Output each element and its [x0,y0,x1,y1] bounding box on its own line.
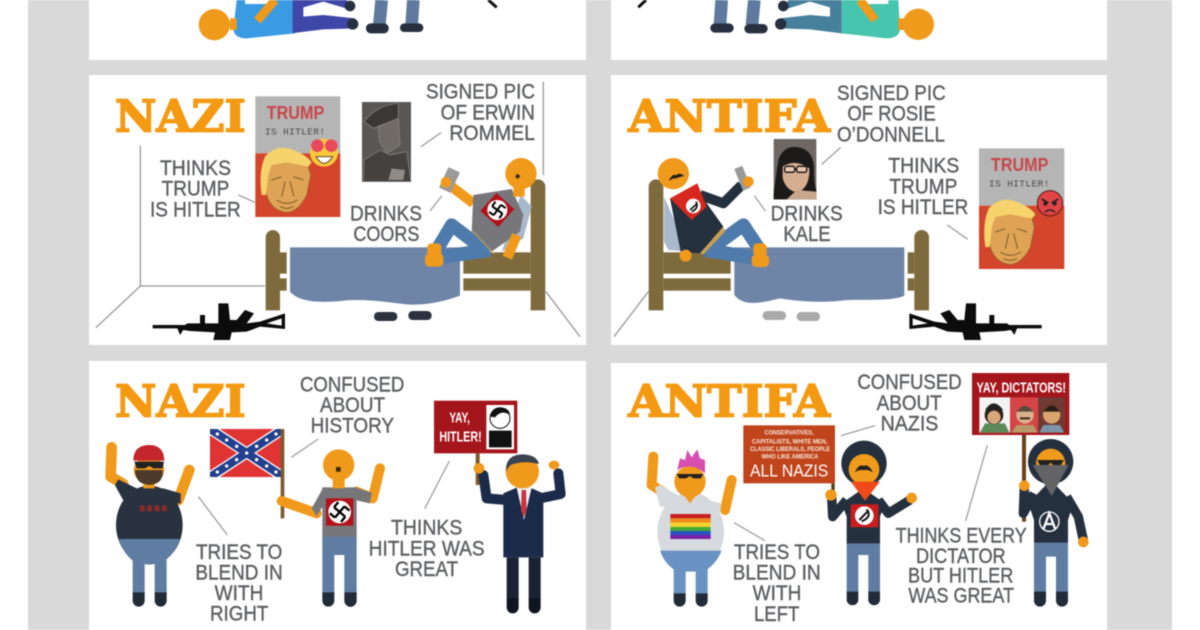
icon: armband emblem [480,193,514,227]
blanket [290,247,460,305]
sign: Yay, Hitler! [434,401,517,485]
rifle on floor [153,303,285,340]
figure: Antifa on bed [658,158,769,267]
figure: Nazi on bed [425,158,537,267]
text: thinks Hitler was great [369,517,485,581]
sign: yay, dictators: YAY, DICTATORS! [977,381,1066,397]
poster: Trump is Hitler with heart-eyes emoji: IS HITLER! [265,126,325,137]
text: drinks kale [771,202,843,246]
icon: bat tip [638,0,646,7]
figure: man in gray armband shirt [282,449,380,607]
text: thinks Trump is Hitler [878,155,968,219]
text: thinks Hitler was great: HITLER WAS [369,537,485,560]
text: thinks Trump is Hitler [150,157,241,221]
text: signed pic: SIGNED PIC [426,80,535,103]
room wall lines [96,82,580,337]
leader line [734,523,765,541]
photo: Rosie O'Donnell portrait [774,139,816,199]
sign: yay, dictators [972,373,1069,522]
leader line [966,445,987,521]
text: drinks kale: DRINKS [771,202,843,225]
leader line [754,196,765,211]
text: tries to blend in with left [733,541,821,626]
leader line [822,147,841,164]
text: drinks Coors: DRINKS [350,203,422,226]
text: signed pic: ROMMEL [449,122,535,145]
panel: top right (cropped) [611,0,1107,60]
leader line [841,426,875,436]
sign: all Nazis: CAPITALISTS, WHITE MEN, [752,438,827,445]
text: tries to blend in with right: TRIES TO [196,541,282,564]
text: thinks Hitler was great: THINKS [391,517,462,540]
text: signed pic: OF ROSIE [847,103,936,126]
icon: hammer and sickle emblem [851,504,878,527]
leader line [430,196,442,211]
rifle on floor [909,303,1042,340]
flag: Confederate battle flag on pole [210,429,284,518]
text: thinks Trump is Hitler: TRUMP [162,178,229,201]
sign: all Nazis: CONSERVATIVES, [764,430,814,437]
text: confused about Nazis: NAZIS [881,413,938,436]
text: thinks Trump is Hitler: IS HITLER [150,198,241,221]
text: thinks Hitler was great: GREAT [395,558,458,581]
sign: all Nazis: ALL NAZIS [750,461,828,481]
figure: person with pride shirt [652,449,732,607]
bed frame [649,179,929,310]
text: thinks Trump is Hitler: THINKS [888,155,959,178]
sign: all Nazis: CLASSIC LIBERALS, PEOPLE [750,446,830,453]
poster: Trump is Hitler with angry emoji: TRUMP [991,154,1048,175]
icon: anarchy symbol [1040,512,1059,531]
icon: armband emblem [326,498,353,526]
text: confused about history [300,374,404,438]
text: thinks Trump is Hitler: THINKS [160,157,231,180]
panel: top left (cropped) [89,0,586,60]
panel: Nazi rally [89,361,586,630]
bed frame [266,179,545,310]
text: tries to blend in with left: TRIES TO [734,541,820,564]
text: tries to blend in with left: BLEND IN [733,561,821,584]
text: confused about history: HISTORY [311,415,394,438]
text: thinks every dictator but Hitler was great: THINKS EVERY [896,525,1027,548]
text: signed pic [837,82,946,147]
leader line [198,497,227,535]
text: thinks every dictator but Hitler was great [896,525,1027,607]
text: tries to blend in with left: LEFT [754,603,799,626]
panel: Antifa bedroom [611,75,1107,345]
sign: Yay, Hitler!: YAY, [449,411,470,427]
text: signed pic [426,80,535,145]
text: thinks Trump is Hitler: IS HITLER [878,196,968,219]
heading: ANTIFA: ANTIFA [627,92,831,143]
text: confused about Nazis: ABOUT [877,392,942,415]
text: signed pic: SIGNED PIC [837,82,946,105]
room wall line [614,292,648,337]
text: tries to blend in with right: BLEND IN [195,561,283,584]
text: confused about Nazis [857,371,962,436]
panel: Antifa rally [611,363,1107,630]
sign: Yay, Hitler!: HITLER! [439,430,482,446]
text: signed pic: OF ERWIN [441,101,535,124]
leader line [421,133,441,147]
poster: Trump is Hitler with angry emoji [979,148,1064,269]
panel: Nazi bedroom [89,75,586,345]
icon: bat tip [488,0,497,7]
text: thinks every dictator but Hitler was great: BUT HITLER [908,565,1013,588]
text: drinks Coors [350,203,422,246]
photo: Erwin Rommel portrait [362,102,411,182]
text: tries to blend in with left: WITH [753,582,801,605]
leader line [291,439,318,457]
figure: heavy man in red cap [111,445,189,607]
text: tries to blend in with right [195,541,283,626]
text: confused about history: CONFUSED [300,374,404,397]
text: tries to blend in with right: RIGHT [210,603,268,626]
blanket [734,247,904,303]
icon: lying figure in blue [199,0,358,40]
sign: all Nazis [743,425,835,517]
text: tries to blend in with right: WITH [215,582,263,605]
slippers under bed [763,311,820,321]
text: thinks Trump is Hitler: TRUMP [889,175,957,198]
poster: Trump is Hitler with heart-eyes emoji [255,96,340,217]
icon: red scarf emblem [670,183,707,220]
sign: all Nazis: WHO LIKE AMERICA [762,453,818,460]
text: thinks every dictator but Hitler was great: WAS GREAT [908,584,1014,607]
icon: standing figure legs [366,0,423,33]
leader line [238,195,255,202]
text: drinks Coors: COORS [353,223,419,246]
figure: hooded masked person [1019,439,1089,607]
figure: hooded person with scarf [825,441,917,605]
poster: Trump is Hitler with angry emoji: IS HITLER! [989,178,1049,189]
icon: rainbow flag [670,514,711,539]
text: confused about history: ABOUT [320,394,385,417]
text: confused about Nazis: CONFUSED [857,371,962,394]
heading: NAZI: NAZI [115,377,246,428]
slippers under bed [374,311,432,321]
leader line [425,461,449,509]
figure: man in navy suit [474,454,561,613]
text: drinks kale: KALE [783,223,831,246]
icon: standing figure legs [710,0,768,33]
text: thinks every dictator but Hitler was great: DICTATOR [916,545,1006,568]
poster: Trump is Hitler with heart-eyes emoji: TRUMP [267,102,324,123]
text: signed pic: O’DONNELL [837,124,945,147]
heading: ANTIFA: ANTIFA [627,377,831,428]
leader line [947,225,968,239]
heading: NAZI: NAZI [115,92,246,143]
icon: lying figure in teal [775,0,934,40]
